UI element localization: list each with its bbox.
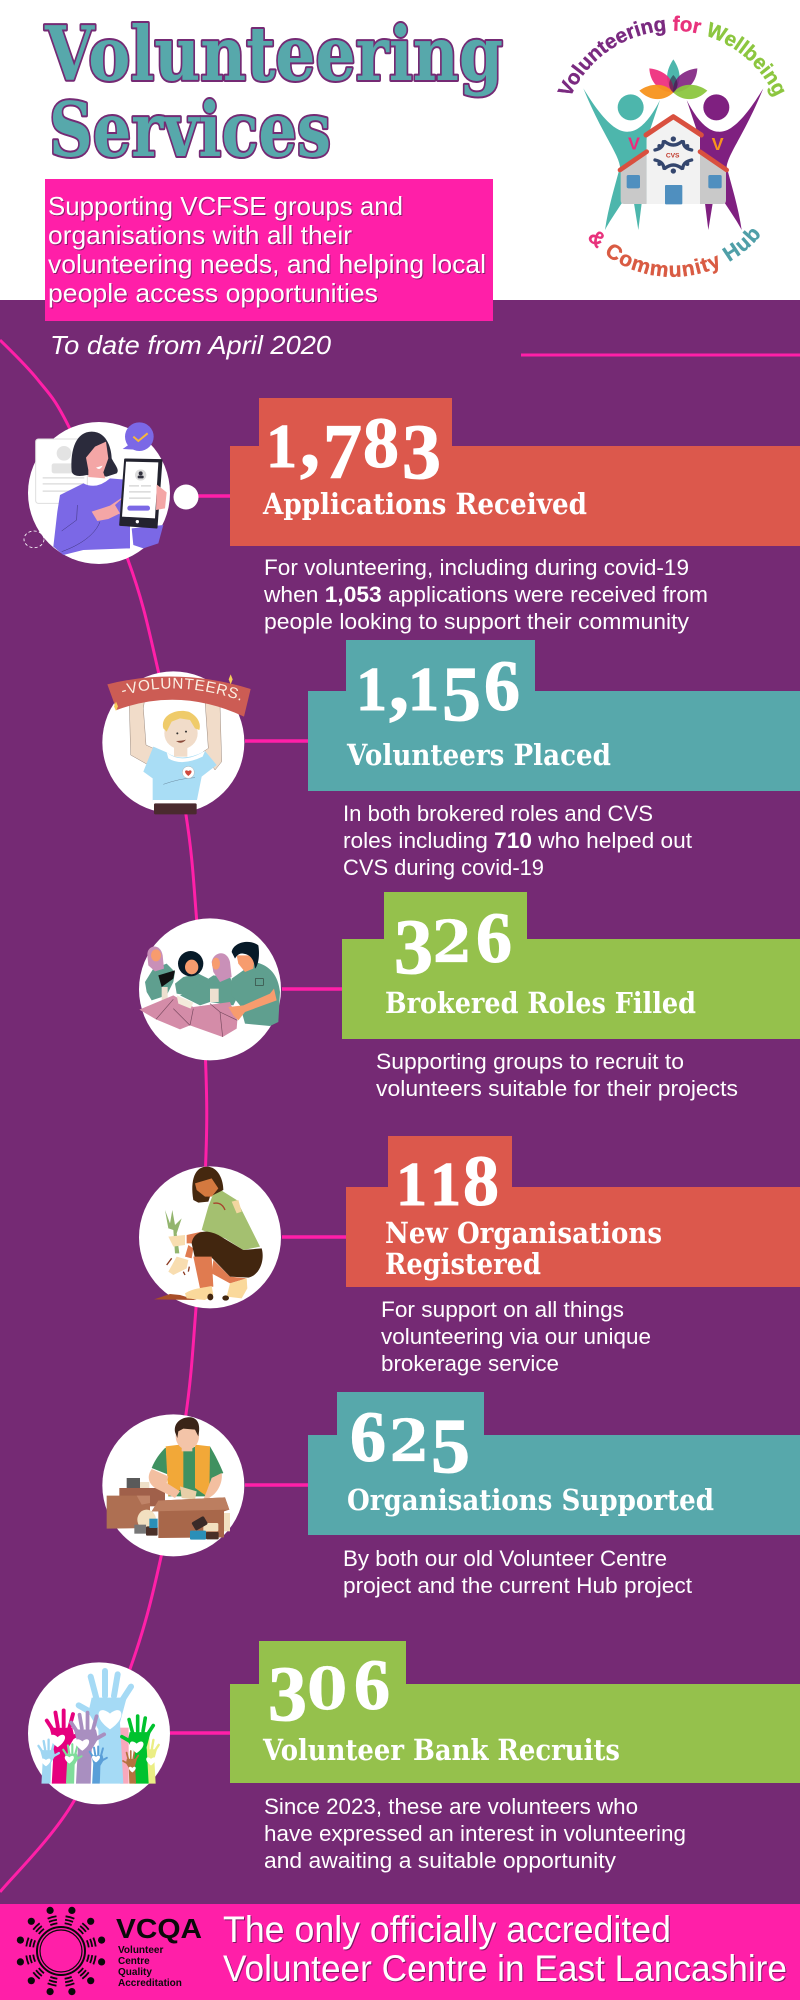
description: volunteers placed (343, 801, 692, 880)
panel: organisations supported (308, 1392, 800, 1535)
subheading: date range: To date from April 2020 (50, 330, 332, 360)
title: Volunteering (44, 10, 503, 98)
icon: VCQA ring (17, 1907, 105, 1995)
logo artwork: V (628, 133, 640, 153)
stat number: 8 (363, 403, 399, 483)
description: volunteer bank recruits: and awaiting a suitable opportunity (264, 1848, 616, 1873)
stat number: 3 (402, 408, 441, 495)
stat heading: Volunteers Placed (346, 738, 611, 772)
description: volunteer bank recruits: have expressed an interest in volunteering (264, 1821, 686, 1846)
VCQA wordmark (116, 1913, 202, 1989)
stat number: 5 (431, 1402, 470, 1489)
callout: intro text box (45, 179, 493, 321)
stat number: 5 (442, 650, 481, 737)
stat heading: Applications Received (262, 487, 587, 521)
stat heading: New Organisations (385, 1216, 662, 1250)
stat number: 6 (484, 646, 520, 726)
description: volunteer bank recruits (264, 1794, 686, 1873)
connector: card 2 (245, 739, 308, 743)
icon: volunteer holding banner (102, 671, 251, 814)
description: brokered roles filled: Supporting groups to recruit to (376, 1049, 684, 1074)
description: applications received: people looking to support their community (264, 609, 689, 634)
logo ring text bottom: & Community Hub (588, 229, 760, 278)
stat heading: Volunteer Bank Recruits (262, 1733, 620, 1767)
description: new organisations registered (381, 1297, 651, 1376)
description: organisations supported: By both our old Volunteer Centre (343, 1546, 667, 1571)
description: volunteer bank recruits: Since 2023, these are volunteers who (264, 1794, 638, 1819)
stat tab and band (230, 1641, 800, 1783)
stat number: 6 (476, 898, 512, 978)
footer statement: The only officially accredited (223, 1909, 671, 1950)
VCQA wordmark: Accreditation (118, 1978, 182, 1989)
stat number: 1 (266, 413, 297, 481)
stat number: 2 (389, 1407, 429, 1475)
footer statement: Volunteer Centre in East Lancashire (223, 1948, 787, 1989)
stat number: 6 (350, 1397, 386, 1477)
description: organisations supported: project and the current Hub project (343, 1573, 692, 1598)
stat number: 1 (356, 656, 387, 724)
logo artwork: CVS (666, 153, 680, 160)
stat heading: Brokered Roles Filled (385, 986, 696, 1020)
stat number: , (389, 640, 409, 728)
background: white header (0, 0, 800, 300)
panel: applications received (230, 397, 800, 546)
icon: woman planting (139, 1166, 281, 1308)
stat number: 8 (463, 1141, 499, 1221)
callout: intro text box: volunteering needs, and helping local (48, 249, 486, 279)
description: volunteers placed: CVS during covid-19 (343, 855, 544, 880)
VCQA wordmark: Volunteer (118, 1945, 163, 1956)
title (44, 10, 503, 174)
description: brokered roles filled: volunteers suitable for their projects (376, 1076, 738, 1101)
stat number: 7 (323, 408, 362, 495)
title: Services (49, 86, 331, 174)
connector: card 1 (174, 484, 230, 510)
callout: intro text box: organisations with all their (48, 220, 352, 250)
connector: card 5 (245, 1483, 308, 1487)
footer statement (223, 1909, 787, 1989)
stat number: 3 (394, 903, 433, 990)
VCQA wordmark: VCQA (116, 1913, 202, 1944)
panel: volunteers placed (308, 640, 800, 791)
description: volunteers placed: In both brokered roles and CVS (343, 801, 653, 826)
stat number: 1 (430, 1151, 461, 1219)
stat number: 1 (396, 1151, 427, 1219)
panel: volunteer bank recruits (230, 1641, 800, 1783)
icon: raised colourful hands (28, 1662, 170, 1804)
connector: card 4 (282, 1235, 346, 1239)
connector: card 3 (282, 987, 342, 991)
description: brokered roles filled (376, 1049, 738, 1101)
connector: card 6 (170, 1731, 230, 1735)
callout: intro text box: Supporting VCFSE groups and (48, 191, 403, 221)
stat number: , (300, 397, 320, 485)
logo artwork (583, 59, 763, 230)
icon: man in vest packing boxes (102, 1414, 244, 1556)
stat heading line two: Registered (385, 1247, 541, 1281)
callout: intro text box: people access opportunities (48, 278, 378, 308)
description: new organisations registered: volunteering via our unique (381, 1324, 651, 1349)
decorative pink rule: top right (521, 354, 800, 356)
stat number: 6 (354, 1645, 390, 1725)
stat tab and band (308, 640, 800, 791)
icon: woman signing up on a phone (24, 422, 170, 564)
panel: brokered roles filled (342, 892, 800, 1039)
description: volunteers placed: roles including 710 who helped out (343, 828, 692, 853)
logo: Volunteering for Wellbeing & Community Hub (557, 16, 785, 278)
panel: new organisations registered (346, 1136, 800, 1287)
description: new organisations registered: brokerage service (381, 1351, 559, 1376)
timeline curve (0, 340, 207, 1892)
logo ring text top: Volunteering for Wellbeing (557, 16, 785, 97)
description: applications received: when 1,053 applications were received from (263, 582, 708, 607)
description: applications received: For volunteering, including during covid-19 (264, 555, 689, 580)
description: applications received (263, 555, 708, 634)
stat number: 3 (268, 1650, 307, 1737)
stat tab and band (346, 1136, 800, 1287)
stat number: 2 (432, 908, 472, 976)
stat tab and band (342, 892, 800, 1039)
stat number: 0 (307, 1655, 347, 1723)
VCQA wordmark: Quality (118, 1967, 152, 1978)
stat number: 1 (408, 656, 439, 724)
stat tab and band (230, 398, 800, 546)
description: organisations supported (343, 1546, 692, 1598)
logo artwork: V (712, 134, 724, 154)
VCQA wordmark: Centre (118, 1956, 150, 1967)
icon: team packing boxes (139, 918, 281, 1060)
footer banner (0, 1904, 800, 2000)
description: new organisations registered: For support on all things (381, 1297, 624, 1322)
stat heading: Organisations Supported (347, 1483, 714, 1517)
icon: volunteer holding banner: -VOLUNTEERS. (122, 678, 240, 700)
stat tab and band (308, 1392, 800, 1535)
